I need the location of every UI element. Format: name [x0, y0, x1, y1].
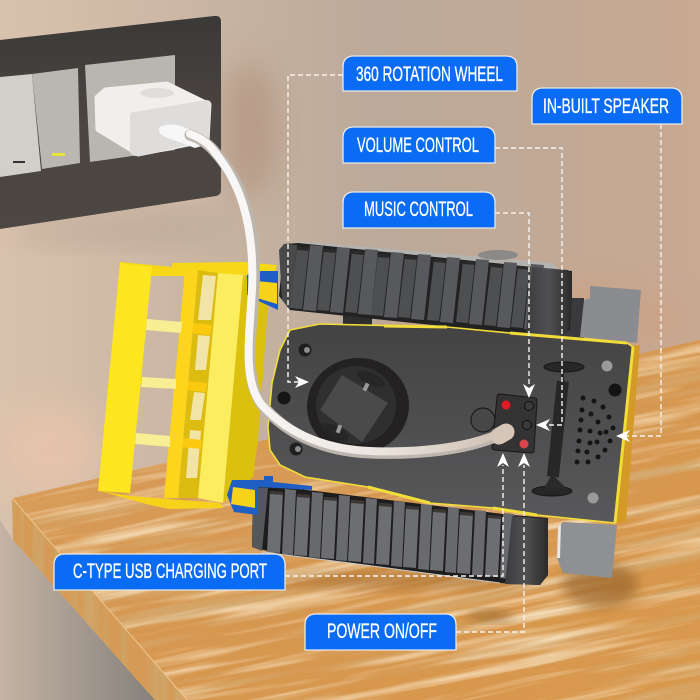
- blade bottom bar: [100, 491, 223, 509]
- label: volume control: [343, 127, 495, 163]
- label: 360 rotation wheel: 360 ROTATION WHEEL: [356, 63, 503, 86]
- robot body base plate: [268, 324, 640, 523]
- left switch: [0, 74, 41, 177]
- speaker grille: [574, 396, 616, 464]
- label: volume control: VOLUME CONTROL: [357, 134, 479, 157]
- 360 rotation wheel: [303, 354, 413, 458]
- label: power on/off: [305, 614, 456, 650]
- label: power on/off: POWER ON/OFF: [327, 620, 437, 643]
- white charging cable: [190, 134, 506, 453]
- wall switch plate: [0, 16, 221, 229]
- label: 360 rotation wheel: [343, 56, 517, 91]
- label: c-type usb charging port: [54, 554, 285, 590]
- blade front panel: [198, 273, 243, 503]
- blade inner section: [178, 270, 218, 498]
- dashed line: usb port: [285, 453, 509, 576]
- volume button: [524, 402, 534, 410]
- power button: [520, 440, 528, 448]
- label: c-type usb charging port: C-TYPE USB CHARGING PORT: [73, 560, 267, 583]
- red led: [502, 400, 510, 410]
- socket plate: [85, 55, 175, 162]
- music button: [522, 420, 532, 430]
- label: music control: MUSIC CONTROL: [364, 198, 473, 221]
- dashed line: power: [456, 453, 530, 632]
- blade middle rail: [164, 270, 198, 498]
- middle switch: [32, 68, 80, 169]
- blade left rail: [98, 263, 152, 493]
- dashed line: 360 rotation wheel: [288, 75, 343, 388]
- yellow dozer blade: [98, 262, 277, 509]
- wood table: [0, 340, 700, 700]
- dashed line: volume control: [495, 148, 562, 431]
- screws and holes: [278, 344, 622, 504]
- rear grey blocks: [557, 286, 641, 578]
- blade rungs: [135, 319, 182, 447]
- blue track connectors: [227, 271, 312, 515]
- bottom track: [252, 486, 548, 585]
- speaker side bar: [532, 362, 584, 496]
- dashed line: music control: [495, 213, 535, 398]
- usb charger: [96, 83, 211, 156]
- top track: [279, 241, 584, 338]
- blade shadow panel: [223, 273, 268, 503]
- dashed line: in-built speaker: [616, 124, 661, 442]
- label: music control: [343, 192, 495, 228]
- blade top bar: [120, 262, 277, 276]
- control panel: [471, 394, 537, 453]
- label: in-built speaker: [532, 88, 682, 124]
